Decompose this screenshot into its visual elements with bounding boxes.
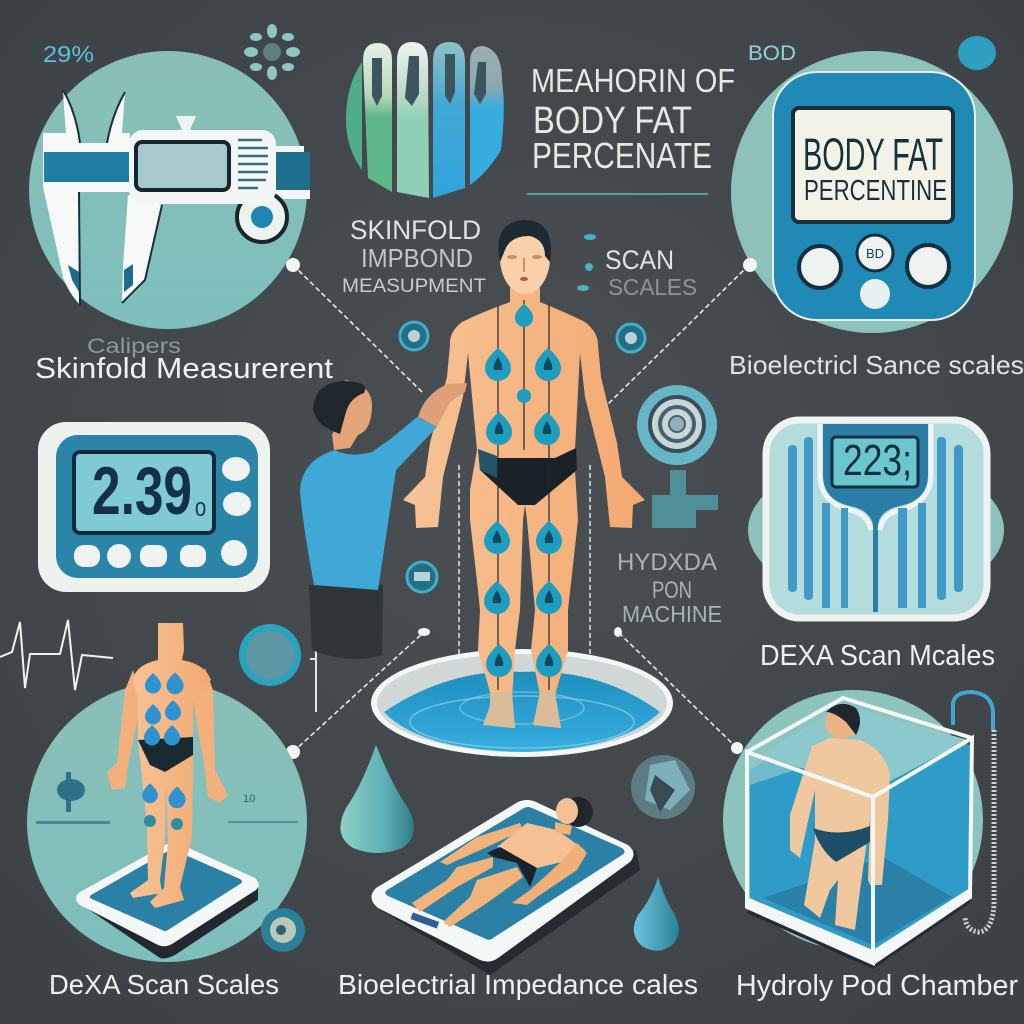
icon: target badge <box>637 385 718 528</box>
knee electrodes <box>144 815 183 830</box>
label: BOD: BOD <box>748 42 796 65</box>
scale value: 223; <box>843 436 912 485</box>
icon: gear cluster <box>244 24 300 80</box>
heading: dexa scan mcales: DEXA Scan Mcales <box>760 640 995 672</box>
figure on scale <box>130 623 211 908</box>
label: calipers: Calipers <box>87 335 181 358</box>
icon: colour strips <box>346 42 504 198</box>
label: scan scales: SCAN <box>605 245 674 275</box>
chart marks <box>36 772 298 824</box>
label: hydxda pon machine: HYDXDA <box>617 549 717 576</box>
briefs small <box>138 737 193 772</box>
electrode dots <box>484 304 562 677</box>
panel: scale readout <box>748 420 1004 618</box>
icon: ring <box>261 908 305 952</box>
readout value: 2.39 <box>92 453 192 529</box>
title <box>531 62 735 176</box>
connector dots <box>286 258 757 759</box>
label: skinfold impbond: MEASUPMENT <box>342 276 486 297</box>
display text: BODY FAT <box>803 129 943 180</box>
caption: dexa scan scales: DeXA Scan Scales <box>49 969 279 1000</box>
scale platform <box>76 843 259 959</box>
heading: bioelectrical scales: Bioelectricl Sance scales <box>729 350 1024 380</box>
label: skinfold impbond <box>342 215 486 297</box>
feet tint <box>483 692 561 728</box>
panel: digital readout <box>38 422 270 592</box>
label: scan scales <box>605 245 697 300</box>
arms of figure on scale <box>107 668 228 803</box>
connector lines <box>293 265 749 752</box>
icon: body fat monitor <box>773 72 975 320</box>
person: central figure <box>403 220 645 728</box>
icon: textured badge <box>631 755 695 819</box>
label: scan scales: SCALES <box>608 274 697 300</box>
title rule <box>527 193 708 195</box>
electrode wires <box>498 300 549 690</box>
briefs <box>478 448 577 505</box>
icon: small teal marks <box>577 234 596 291</box>
panel: calipers circle <box>29 51 310 329</box>
title: BODY FAT <box>533 100 692 142</box>
electrode centres <box>493 357 553 666</box>
label: 29%: 29% <box>43 41 94 67</box>
hose <box>953 692 993 730</box>
label: skinfold impbond: IMPBOND <box>361 243 473 273</box>
chart marks: 10 <box>243 793 255 805</box>
caption: hydroly pod chamber: Hydroly Pod Chamber <box>736 970 1018 1002</box>
badge details <box>408 330 637 581</box>
face <box>507 255 542 281</box>
caption: bioelectrical impedance: Bioelectrial Impedance cales <box>338 969 698 1000</box>
icon: calipers <box>43 90 310 305</box>
icon: body fat monitor: BD <box>866 246 884 261</box>
icons: small badges <box>400 322 645 592</box>
icon: drop large <box>340 745 414 853</box>
panel: device circle <box>731 51 1013 333</box>
pool <box>371 649 673 757</box>
label: hydxda pon machine <box>617 549 722 627</box>
icon: drop small <box>634 877 679 951</box>
panel: digital readout: 0 <box>195 499 206 521</box>
bed with lying figure <box>371 797 640 975</box>
person in chamber <box>790 704 890 930</box>
lying figure <box>412 797 593 927</box>
icon: round badge <box>239 624 301 686</box>
electrodes small <box>142 672 186 808</box>
title: MEAHORIN OF <box>531 62 735 99</box>
icon: body fat monitor: PERCENTINE <box>804 175 947 207</box>
panel: dexa circle <box>27 623 307 962</box>
label: skinfold impbond: SKINFOLD <box>350 215 481 245</box>
panel: pod chamber <box>723 690 994 969</box>
vertical tick <box>310 627 316 712</box>
label: hydxda pon machine: MACHINE <box>622 601 722 627</box>
icon: heartbeat line <box>0 620 113 690</box>
chamber frame <box>747 698 972 963</box>
person: measuring technician <box>300 380 467 659</box>
heading: skinfold measurement: Skinfold Measurerent <box>35 353 333 385</box>
icon: small badge <box>958 36 996 70</box>
title: PERCENATE <box>532 135 712 176</box>
label: hydxda pon machine: PON <box>652 577 692 604</box>
